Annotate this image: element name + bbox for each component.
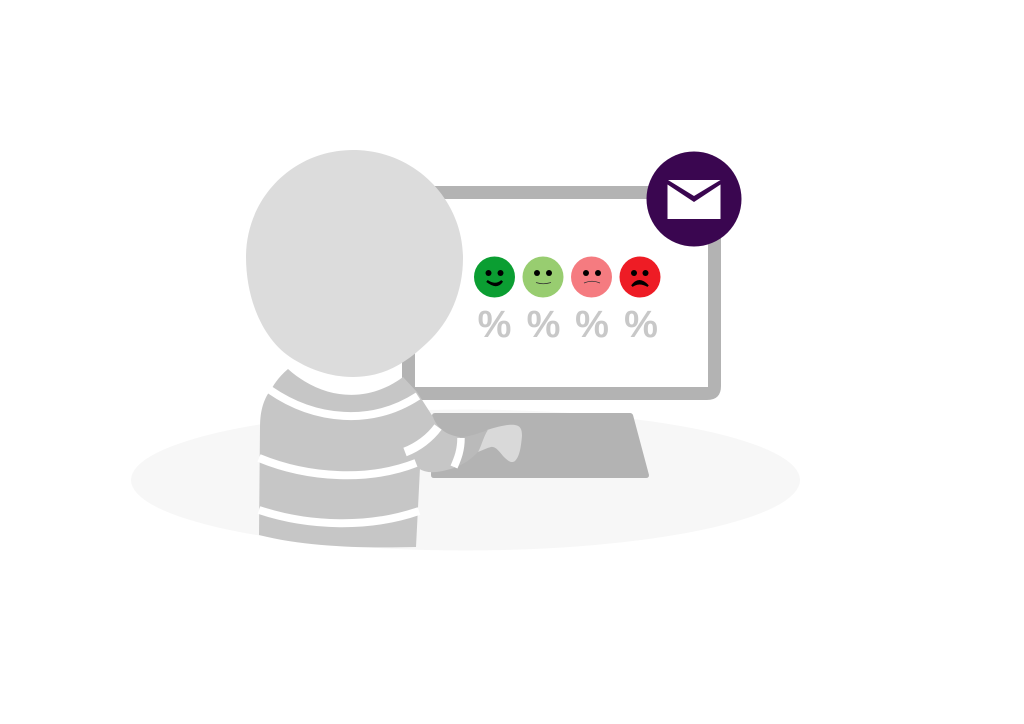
satisfaction faces: [474, 256, 660, 298]
percent labels: %: [624, 304, 658, 346]
keyboard: [431, 413, 649, 478]
percent labels: %: [575, 304, 609, 346]
face: sad: [571, 256, 612, 298]
face: very happy: [474, 256, 515, 298]
person body with striped sweater: [259, 369, 522, 547]
face: very sad: [620, 256, 660, 298]
cuff: [452, 430, 488, 468]
percent labels: [478, 304, 658, 346]
arm: [400, 377, 460, 472]
torso: [259, 369, 440, 547]
percent labels: %: [478, 304, 511, 346]
percent labels: %: [527, 304, 560, 346]
email badge: [646, 152, 742, 246]
head: [246, 150, 463, 377]
sweater stripes: [259, 390, 461, 523]
face: happy: [522, 256, 564, 298]
monitor screen: [415, 199, 708, 387]
hand: [478, 425, 522, 462]
icon: envelope: [668, 180, 720, 219]
monitor: [402, 186, 721, 400]
floor shadow ellipse: [131, 410, 800, 550]
